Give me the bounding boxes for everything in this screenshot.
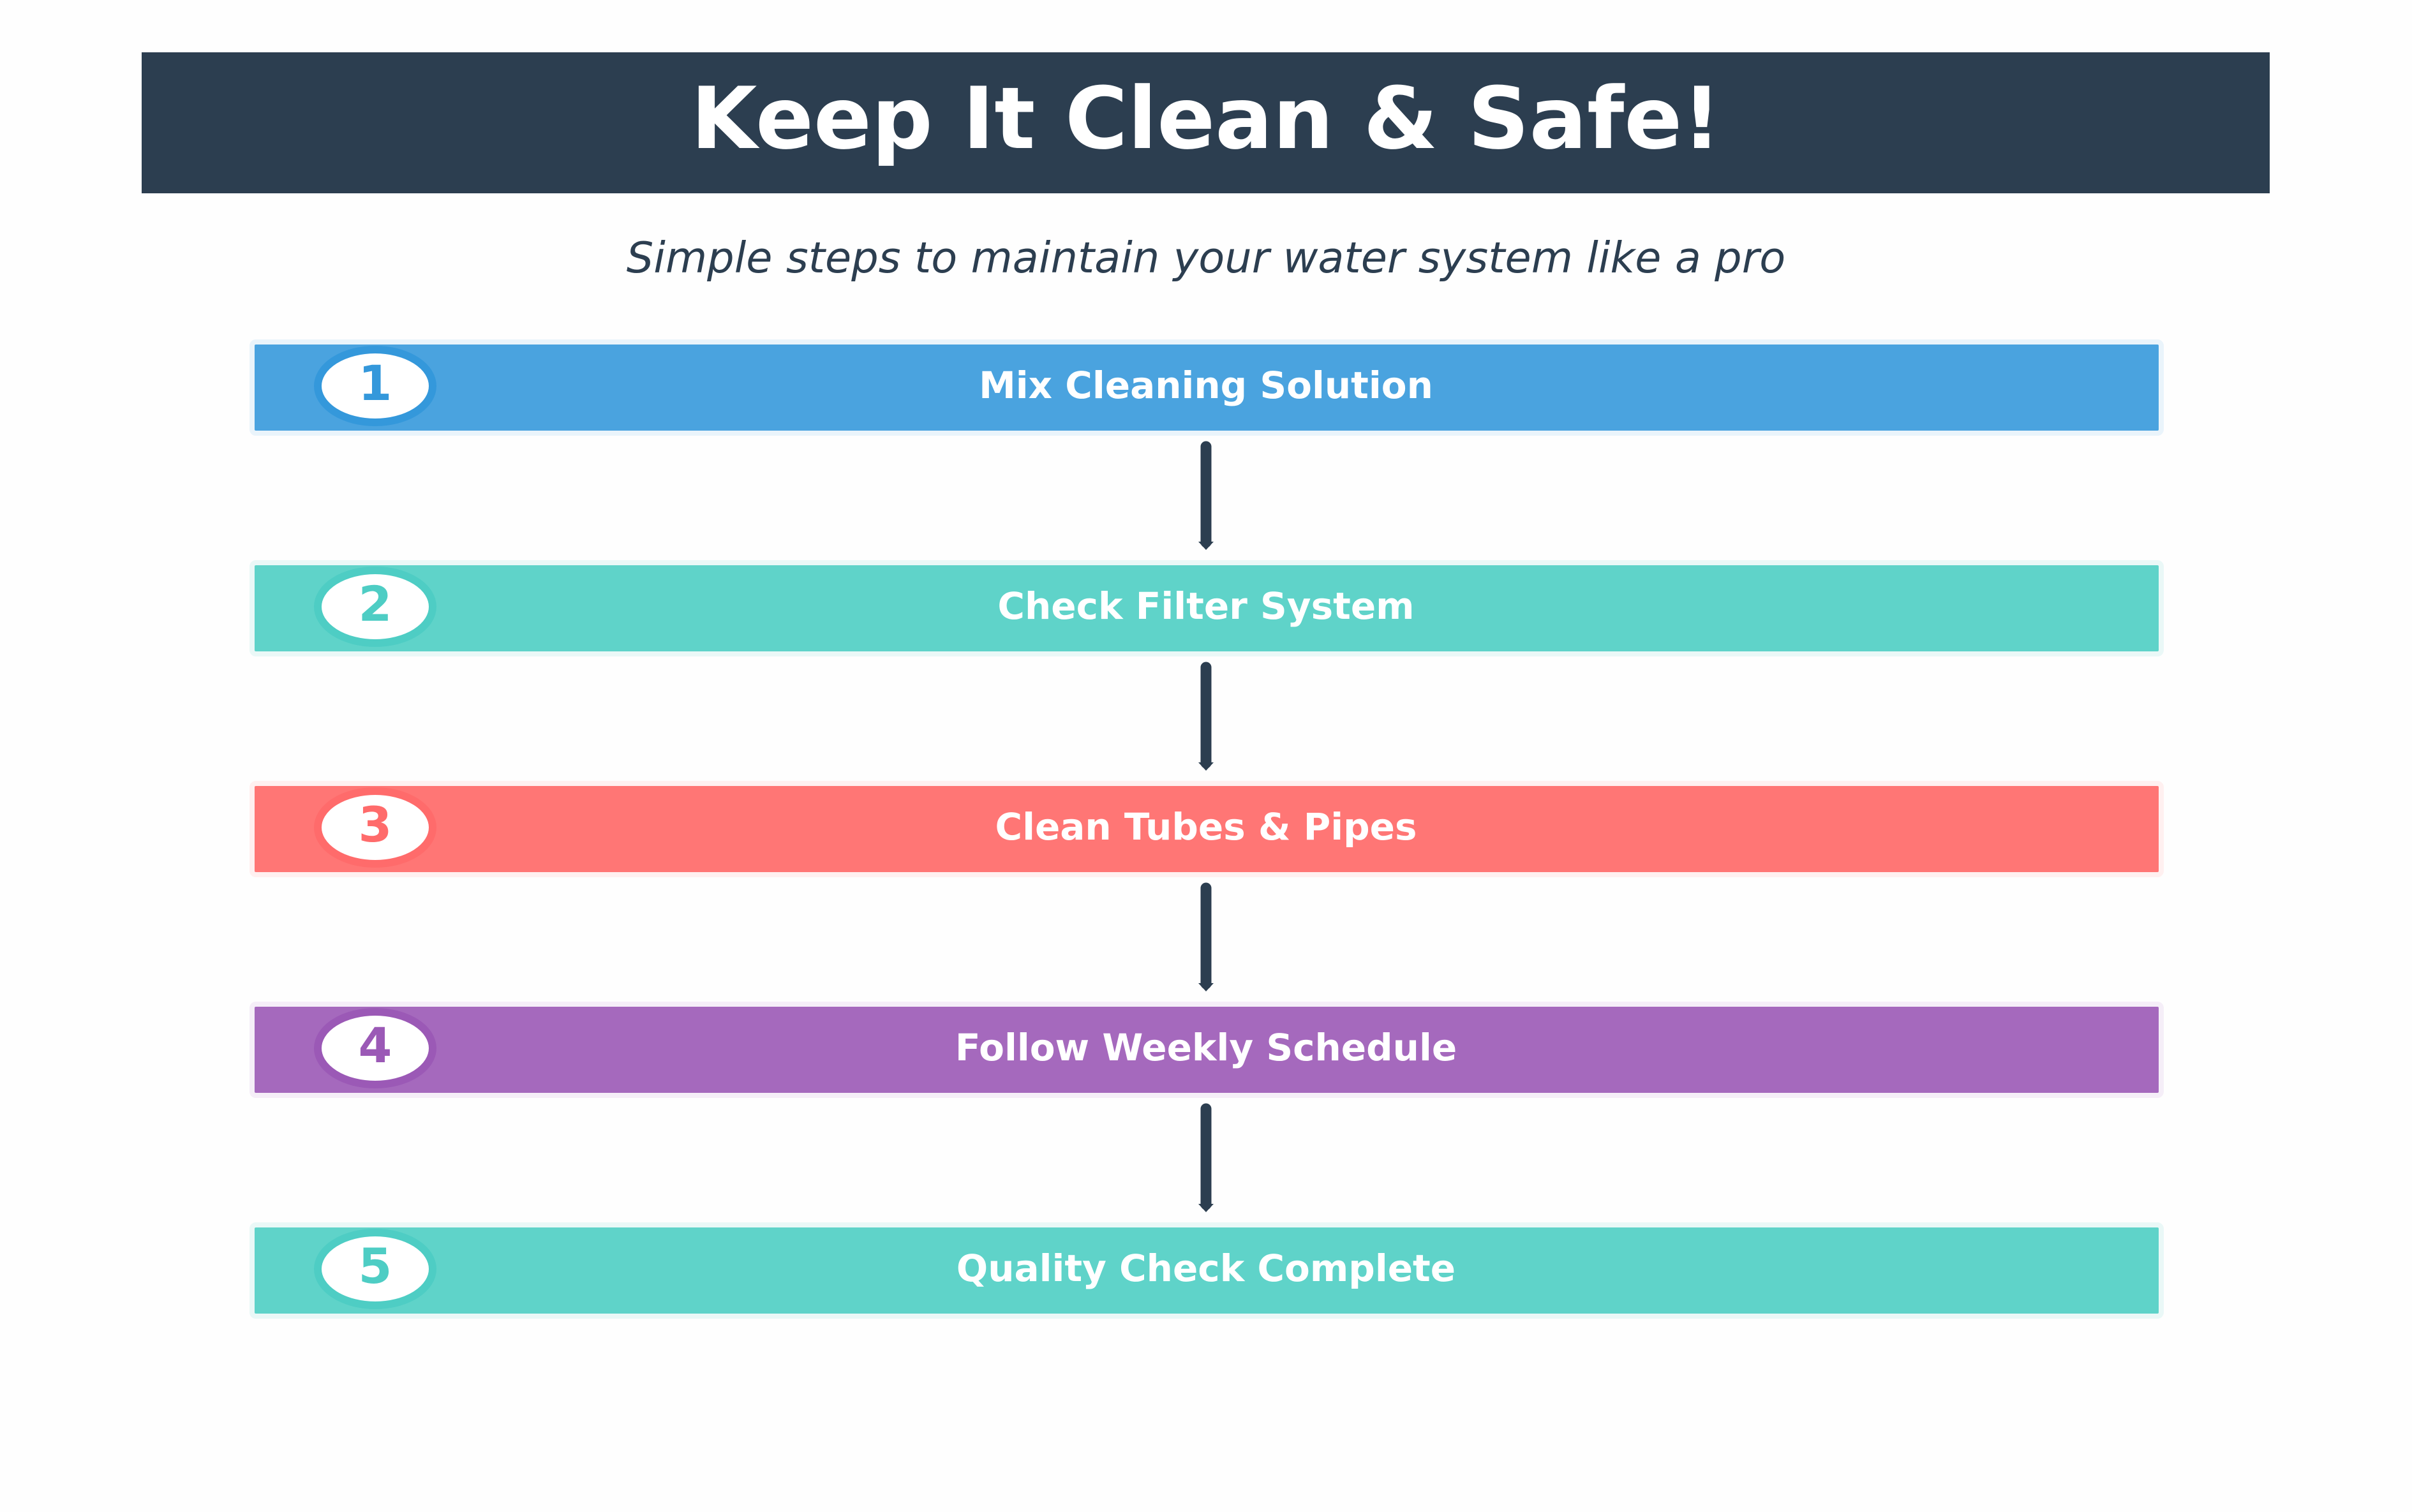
step 4 [252, 1004, 2161, 1095]
step 1 [252, 342, 2161, 433]
step 2 [252, 563, 2161, 654]
step 1: Mix Cleaning Solution [979, 364, 1433, 407]
arrow 4 [1198, 1109, 1214, 1212]
step 5 [252, 1225, 2161, 1316]
arrow 1 [1198, 447, 1214, 550]
step 4: Follow Weekly Schedule [955, 1026, 1457, 1069]
step 3: Clean Tubes & Pipes [995, 805, 1417, 849]
title [142, 52, 2270, 193]
step 5: 5 [359, 1238, 392, 1294]
subtitle: Simple steps to maintain your water system like a pro [627, 233, 1785, 283]
title: Keep It Clean & Safe! [691, 69, 1721, 168]
step 2: Check Filter System [997, 584, 1415, 628]
step 3: 3 [359, 796, 392, 853]
step 3 [252, 783, 2161, 875]
step 2: 2 [359, 575, 392, 632]
arrow 2 [1198, 667, 1214, 771]
step 4: 4 [359, 1017, 392, 1074]
step 5: Quality Check Complete [957, 1247, 1455, 1290]
arrow 3 [1198, 888, 1214, 991]
step 1: 1 [359, 355, 392, 411]
